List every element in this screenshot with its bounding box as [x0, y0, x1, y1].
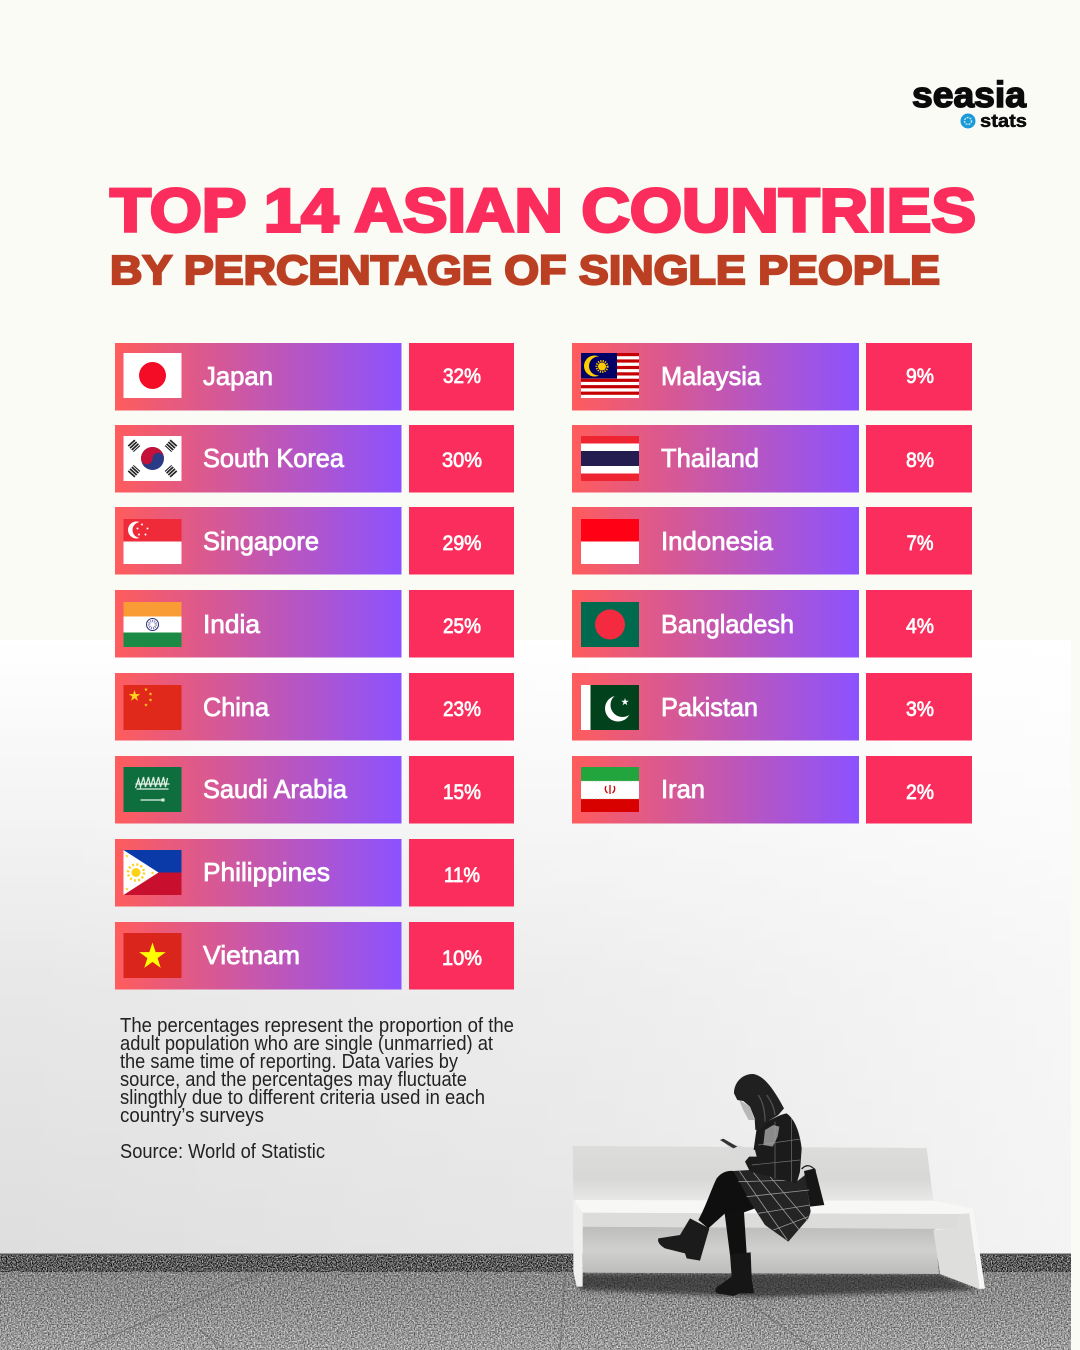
row: Singapore 29%: 29%: [442, 532, 482, 555]
row: Bangladesh 4%: 4%: [906, 615, 934, 638]
row: South Korea 30%: 30%: [442, 449, 482, 472]
logo: seasia stats: seasia: [912, 74, 1027, 115]
row: South Korea 30%: South Korea: [203, 443, 345, 473]
note text block: The percentages represent the proportion of the: [120, 1015, 514, 1037]
row: Thailand 8%: [572, 425, 972, 492]
flag: Vietnam: [124, 933, 182, 978]
title: TOP 14 ASIAN COUNTRIES: [110, 176, 976, 244]
subtitle: BY PERCENTAGE OF SINGLE PEOPLE: [110, 247, 940, 293]
flag: Iran: [581, 767, 639, 812]
flag: South Korea: [124, 436, 182, 481]
row: Iran 2%: 2%: [906, 781, 934, 804]
flag: China: [124, 685, 182, 730]
row: China 23%: 23%: [443, 698, 481, 721]
row: Singapore 29%: [115, 507, 514, 574]
row: Iran 2%: Iran: [661, 774, 705, 804]
flag: Pakistan: [581, 685, 639, 730]
note text block: adult population who are single (unmarried) at: [120, 1033, 493, 1055]
flag: Indonesia: [581, 519, 639, 564]
flag: Bangladesh: [581, 602, 639, 647]
note text block: country’s surveys: [120, 1105, 264, 1127]
flag: Singapore: [124, 519, 182, 564]
row: Vietnam 10%: 10%: [442, 947, 482, 970]
source line: Source: World of Statistic: [120, 1141, 325, 1163]
note text block: [120, 1015, 514, 1127]
flag: Japan: [124, 353, 182, 398]
flag: Saudi Arabia: [124, 767, 182, 812]
note text block: slingthly due to different criteria used in each: [120, 1087, 485, 1109]
woman: [658, 1074, 824, 1296]
handbag: [804, 1168, 824, 1207]
row: Saudi Arabia 15%: Saudi Arabia: [203, 774, 348, 804]
row: India 25%: India: [203, 609, 261, 639]
flag: Thailand: [581, 436, 639, 481]
row: Malaysia 9%: Malaysia: [661, 361, 762, 391]
row: China 23%: [115, 673, 514, 740]
floral embroidery: [763, 1125, 779, 1147]
row: Pakistan 3%: Pakistan: [661, 692, 758, 722]
note text block: the same time of reporting. Data varies by: [120, 1051, 458, 1073]
plaid skirt: [733, 1170, 811, 1242]
row: Vietnam 10%: [115, 922, 514, 990]
note text block: source, and the percentages may fluctuate: [120, 1069, 467, 1091]
row: Indonesia 7%: 7%: [906, 532, 934, 555]
row: India 25%: 25%: [443, 615, 481, 638]
row: Thailand 8%: Thailand: [661, 443, 759, 473]
hair: [734, 1074, 784, 1130]
row: Philippines 11%: [115, 839, 514, 906]
row: Japan 32%: [115, 343, 514, 410]
bench: [573, 1146, 985, 1297]
plaid jacket: [745, 1113, 802, 1183]
flag: Philippines: [124, 850, 182, 895]
row: Philippines 11%: Philippines: [203, 857, 330, 887]
row: Saudi Arabia 15%: [115, 756, 514, 824]
row: Singapore 29%: Singapore: [203, 526, 319, 556]
row: Bangladesh 4%: [572, 590, 972, 658]
row: Thailand 8%: 8%: [906, 449, 934, 472]
standing leg and boot: [724, 1193, 755, 1255]
row: Japan 32%: 32%: [443, 365, 481, 388]
row: Iran 2%: [572, 756, 972, 824]
bench and seated woman: [573, 1074, 985, 1297]
flag: India: [124, 602, 182, 647]
background photo: wall and floor: [0, 640, 1071, 1350]
hand and phone: [725, 1143, 757, 1157]
row: China 23%: China: [203, 692, 270, 722]
row: Saudi Arabia 15%: 15%: [443, 781, 481, 804]
row: Indonesia 7%: [572, 507, 972, 574]
row: South Korea 30%: [115, 425, 514, 492]
row: Bangladesh 4%: Bangladesh: [661, 609, 794, 639]
face: [739, 1100, 755, 1120]
row: Malaysia 9%: [572, 343, 972, 410]
row: Pakistan 3%: 3%: [906, 698, 934, 721]
logo: seasia stats: stats: [980, 110, 1027, 131]
flag: Malaysia: [581, 353, 639, 398]
row: Vietnam 10%: Vietnam: [203, 940, 300, 970]
crossed leg and boot: [698, 1171, 757, 1228]
row: Japan 32%: Japan: [203, 361, 273, 391]
row: India 25%: [115, 590, 514, 658]
row: Indonesia 7%: Indonesia: [661, 526, 774, 556]
logo: seasia stats: [912, 74, 1027, 131]
row: Malaysia 9%: 9%: [906, 365, 934, 388]
row: Pakistan 3%: [572, 673, 972, 740]
row: Philippines 11%: 11%: [444, 864, 480, 887]
